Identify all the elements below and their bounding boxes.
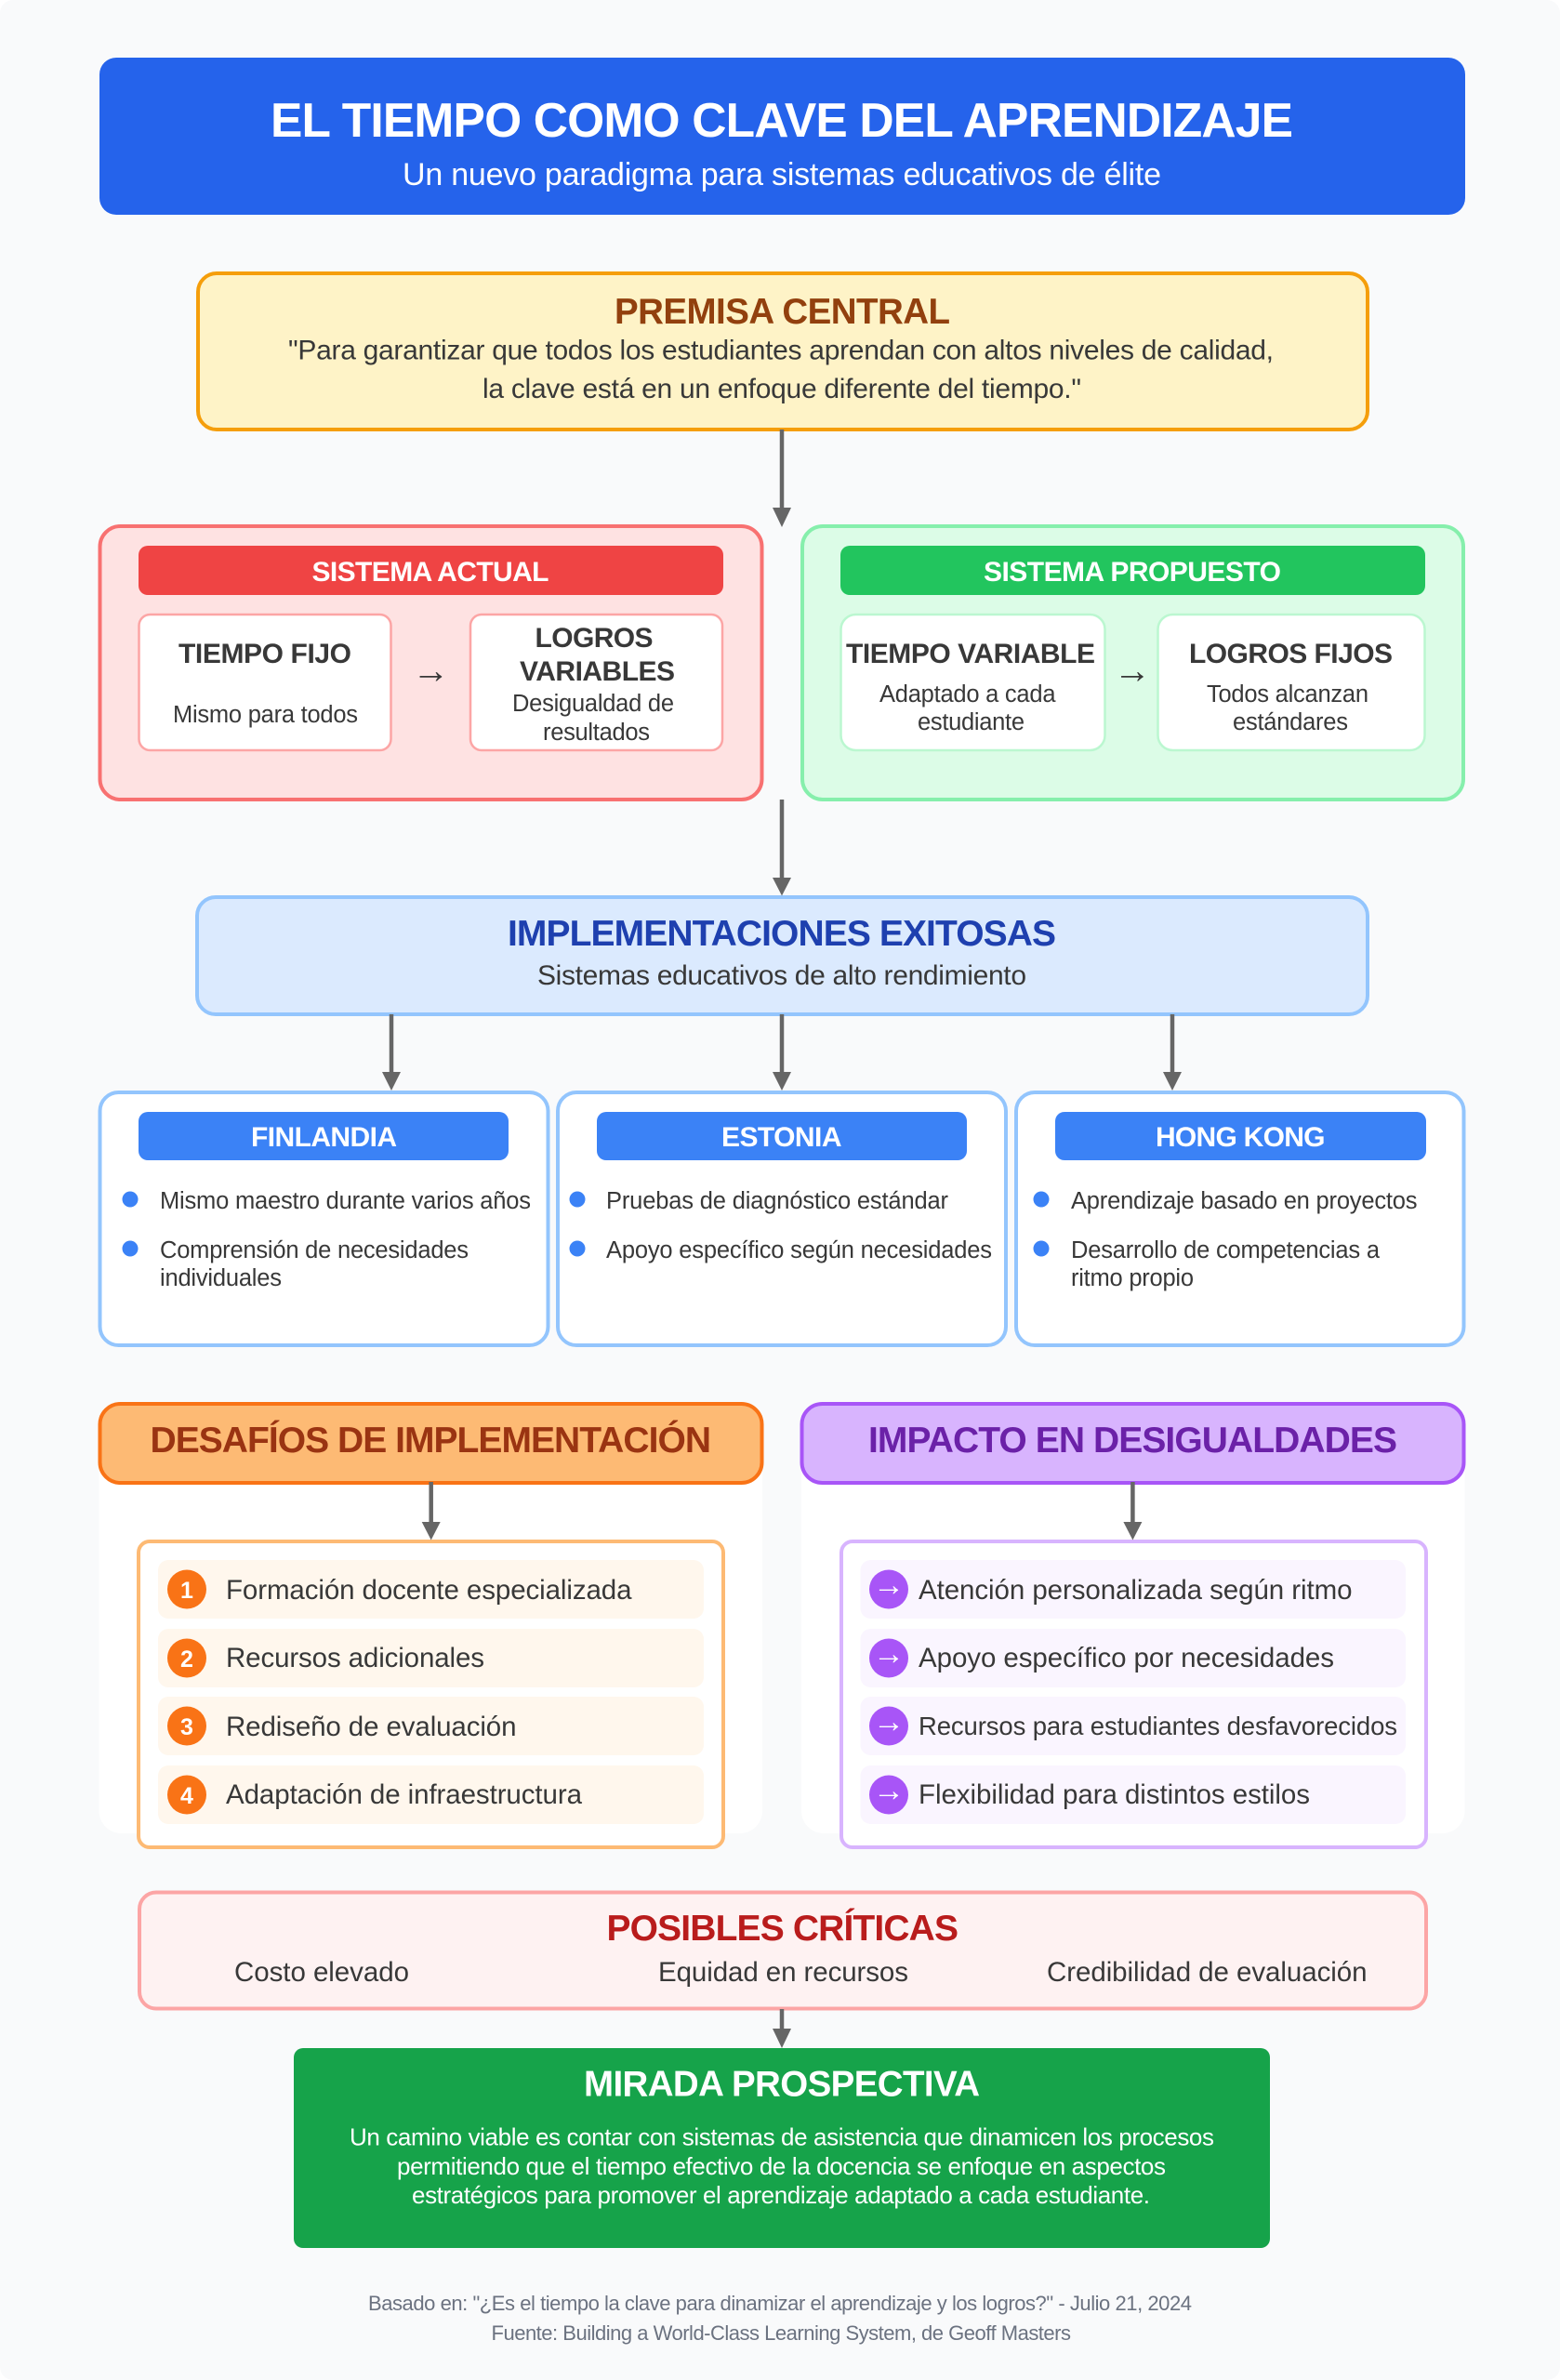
- panel: hong kong: [1016, 1092, 1463, 1345]
- footer: sources: [368, 2292, 1192, 2345]
- item 1: [158, 1560, 704, 1619]
- card: tiempo fijo: Mismo para todos: [173, 702, 358, 728]
- item: recursos: Recursos para estudiantes desfavorecidos: [919, 1712, 1397, 1740]
- item 2: [158, 1629, 704, 1687]
- header: sistema propuesto: SISTEMA PROPUESTO: [984, 557, 1281, 588]
- arrow: premisa to sistemas: [773, 430, 791, 527]
- header: desafios: [100, 1404, 762, 1483]
- item: atencion: [861, 1560, 1406, 1619]
- header: impacto: IMPACTO EN DESIGUALDADES: [868, 1421, 1397, 1461]
- card: logros variables: [470, 615, 722, 750]
- footer: sources: Basado en: "¿Es el tiempo la clave para dinamizar el aprendizaje y los logros?" - Julio 21, 2024: [368, 2292, 1192, 2315]
- arrow: criticas to mirada: [773, 2009, 791, 2048]
- item 4: [158, 1765, 704, 1824]
- arrow: desafios header to list: [422, 1482, 441, 1540]
- card: logros variables: VARIABLES: [520, 656, 675, 687]
- body text: permitiendo que el tiempo efectivo de la docencia se enfoque en aspectos: [397, 2152, 1166, 2180]
- card: tiempo variable: TIEMPO VARIABLE: [846, 639, 1095, 669]
- item: recursos: →: [873, 1704, 905, 1739]
- card: tiempo fijo: [139, 615, 390, 750]
- list box: impacto: [841, 1541, 1426, 1847]
- item 4: 4: [180, 1783, 193, 1809]
- bullet: aprendizaje: Aprendizaje basado en proyectos: [1071, 1188, 1417, 1214]
- item 1: Formación docente especializada: [226, 1575, 632, 1606]
- card: tiempo variable: estudiante: [918, 709, 1025, 735]
- card: tiempo fijo: TIEMPO FIJO: [178, 639, 351, 669]
- bullet: comprension: individuales: [160, 1265, 282, 1291]
- panel: estonia: [558, 1092, 1006, 1345]
- header: desafios: DESAFÍOS DE IMPLEMENTACIÓN: [151, 1420, 711, 1461]
- panel: posibles criticas: [139, 1893, 1426, 2008]
- card: logros fijos: LOGROS FIJOS: [1189, 639, 1393, 669]
- arrow: tiempo fijo to logros variables: →: [413, 651, 450, 692]
- panel: finlandia: [100, 1092, 549, 1345]
- header: finlandia: FINLANDIA: [251, 1122, 397, 1153]
- quote text: "Para garantizar que todos los estudiantes aprendan con altos niveles de calidad,: [288, 335, 1274, 366]
- card: tiempo variable: Adaptado a cada: [879, 681, 1056, 707]
- item: flexibilidad: →: [873, 1773, 905, 1808]
- arrow: to hong kong: [1163, 1014, 1182, 1091]
- card: logros variables: LOGROS: [535, 623, 653, 654]
- bullet: comprension: [123, 1237, 469, 1291]
- panel: implementaciones exitosas: [197, 897, 1368, 1014]
- header: estonia: ESTONIA: [721, 1122, 842, 1153]
- arrow: to finlandia: [382, 1014, 401, 1091]
- card: logros variables: resultados: [543, 720, 650, 746]
- bullet: apoyo: Apoyo específico según necesidades: [606, 1237, 992, 1263]
- arrow: to estonia: [773, 1014, 791, 1091]
- panel: premisa central: [198, 273, 1368, 430]
- panel: impacto en desigualdades: [801, 1404, 1465, 1847]
- card: logros fijos: [1158, 615, 1424, 750]
- bullet: desarrollo: [1034, 1237, 1381, 1291]
- item: costo elevado: Costo elevado: [234, 1957, 409, 1988]
- item 3: 3: [180, 1714, 193, 1740]
- panel: mirada prospectiva: [294, 2048, 1270, 2248]
- card: tiempo variable: [840, 615, 1104, 750]
- heading: mirada prospectiva: MIRADA PROSPECTIVA: [584, 2064, 980, 2105]
- arrow: tiempo variable to logros fijos: →: [1114, 651, 1151, 692]
- panel: sistema propuesto: [802, 526, 1463, 800]
- item 3: Rediseño de evaluación: [226, 1712, 517, 1742]
- header: hong kong: [1055, 1112, 1426, 1160]
- item: flexibilidad: [861, 1765, 1406, 1824]
- header: finlandia: [139, 1112, 509, 1160]
- item 3: [158, 1697, 704, 1755]
- item 2: Recursos adicionales: [226, 1643, 484, 1673]
- heading: implementaciones exitosas: IMPLEMENTACIONES EXITOSAS: [508, 914, 1056, 954]
- bullet: desarrollo: Desarrollo de competencias a: [1071, 1237, 1381, 1263]
- card: logros fijos: Todos alcanzan: [1207, 681, 1368, 707]
- item: flexibilidad: Flexibilidad para distintos estilos: [919, 1779, 1310, 1810]
- panel: sistema actual: [100, 526, 762, 800]
- item 4: Adaptación de infraestructura: [226, 1779, 583, 1810]
- header: sistema actual: [139, 546, 723, 595]
- bullet: pruebas: Pruebas de diagnóstico estándar: [606, 1188, 948, 1214]
- body text: Un camino viable es contar con sistemas de asistencia que dinamicen los procesos: [350, 2123, 1214, 2151]
- item: atencion: →: [873, 1567, 905, 1603]
- bullet: mismo maestro: Mismo maestro durante varios años: [160, 1188, 531, 1214]
- item: apoyo: Apoyo específico por necesidades: [919, 1643, 1334, 1673]
- header: sistema actual: SISTEMA ACTUAL: [312, 557, 549, 588]
- card: logros fijos: estándares: [1233, 709, 1348, 735]
- quote text: [288, 335, 1274, 404]
- list box: desafios: [139, 1541, 723, 1847]
- item: apoyo: [861, 1629, 1406, 1687]
- subtitle: Un nuevo paradigma para sistemas educativos de élite: [403, 157, 1161, 192]
- heading: premisa central: PREMISA CENTRAL: [615, 292, 950, 332]
- item 1: 1: [180, 1578, 193, 1604]
- arrow: sistemas to implementaciones: [773, 800, 791, 896]
- bullet: comprension: Comprensión de necesidades: [160, 1237, 469, 1263]
- footer: sources: Fuente: Building a World-Class Learning System, de Geoff Masters: [491, 2321, 1071, 2345]
- item: recursos: [861, 1697, 1406, 1755]
- arrow: impacto header to list: [1123, 1482, 1142, 1540]
- heading: posibles criticas: POSIBLES CRÍTICAS: [606, 1908, 958, 1949]
- item 2: 2: [180, 1646, 193, 1673]
- item: equidad en recursos: Equidad en recursos: [658, 1957, 908, 1988]
- header: hong kong: HONG KONG: [1156, 1122, 1326, 1153]
- bullet: desarrollo: ritmo propio: [1071, 1265, 1194, 1291]
- item: atencion: Atención personalizada según ritmo: [919, 1575, 1352, 1606]
- header: impacto: [801, 1404, 1463, 1483]
- panel: desafios de implementacion: [99, 1404, 762, 1847]
- header: sistema propuesto: [840, 546, 1425, 595]
- item: credibilidad de evaluacion: Credibilidad de evaluación: [1047, 1957, 1367, 1988]
- body text: estratégicos para promover el aprendizaje adaptado a cada estudiante.: [412, 2181, 1150, 2209]
- body text: [350, 2123, 1214, 2209]
- title banner: [99, 58, 1465, 215]
- card: logros variables: Desigualdad de: [512, 691, 674, 717]
- subheading: Sistemas educativos de alto rendimiento: [537, 960, 1026, 991]
- quote text: la clave está en un enfoque diferente del tiempo.": [483, 374, 1081, 404]
- title: EL TIEMPO COMO CLAVE DEL APRENDIZAJE: [271, 93, 1293, 147]
- item: apoyo: →: [873, 1636, 905, 1672]
- header: estonia: [597, 1112, 967, 1160]
